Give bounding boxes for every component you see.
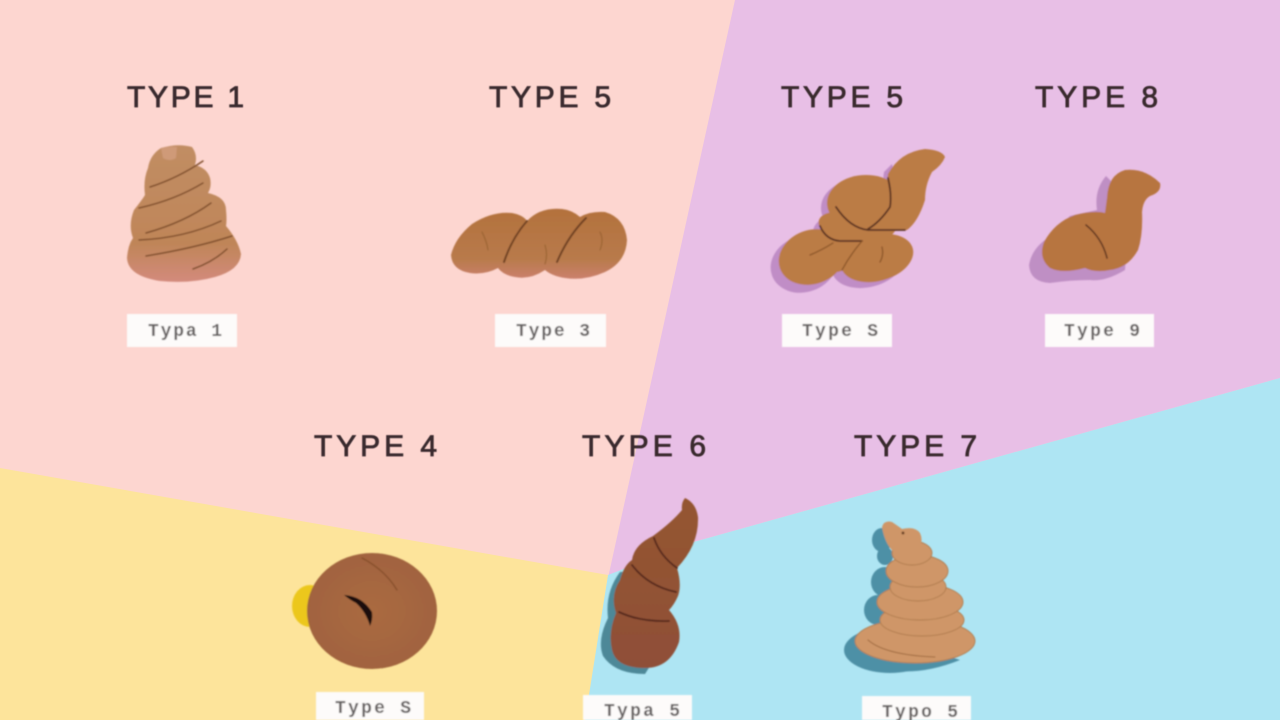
heading: type 1: TYPE 1 xyxy=(127,81,244,114)
panel: blue xyxy=(583,378,1280,720)
heading: type 7: TYPE 7 xyxy=(854,430,977,463)
label: type 1 xyxy=(127,314,237,347)
label: type 5 xyxy=(316,692,424,720)
heading: type 5: TYPE 5 xyxy=(489,81,611,114)
panel: yellow xyxy=(0,468,608,720)
label: type 5 xyxy=(583,695,692,720)
label: type 5: Type S xyxy=(335,699,411,719)
label: type 1: Typa 1 xyxy=(148,322,222,342)
icon: coiled pile xyxy=(844,522,975,673)
label: type 9 xyxy=(1045,314,1154,347)
type 7 group xyxy=(844,430,977,720)
heading: type 5: TYPE 5 xyxy=(781,81,903,114)
icon: stacked coil xyxy=(127,145,241,282)
icon: twisted log xyxy=(451,209,627,279)
panel: lilac xyxy=(608,0,1280,578)
type 1 group xyxy=(127,81,244,347)
type 2 group xyxy=(451,81,627,347)
label: type 3: Type 3 xyxy=(516,322,590,342)
type 8 group xyxy=(1029,81,1160,347)
label: type 3 xyxy=(495,314,606,347)
heading: type 8: TYPE 8 xyxy=(1035,81,1158,114)
label: type 5 xyxy=(862,696,971,720)
heading: type 6: TYPE 6 xyxy=(582,430,706,463)
heading: type 4: TYPE 4 xyxy=(314,430,437,463)
icon: knotted lump xyxy=(762,149,945,302)
label: type 9: Type 9 xyxy=(1064,322,1140,342)
label: type 5: Type S xyxy=(802,322,878,342)
icon: bent lump xyxy=(1029,170,1160,283)
icon: round ball xyxy=(292,553,437,669)
label: type 5 xyxy=(782,314,892,347)
icon: tall spiral xyxy=(601,498,698,674)
type 3 group xyxy=(762,81,945,347)
type 4 group xyxy=(292,430,437,720)
type 6 group xyxy=(582,430,706,720)
